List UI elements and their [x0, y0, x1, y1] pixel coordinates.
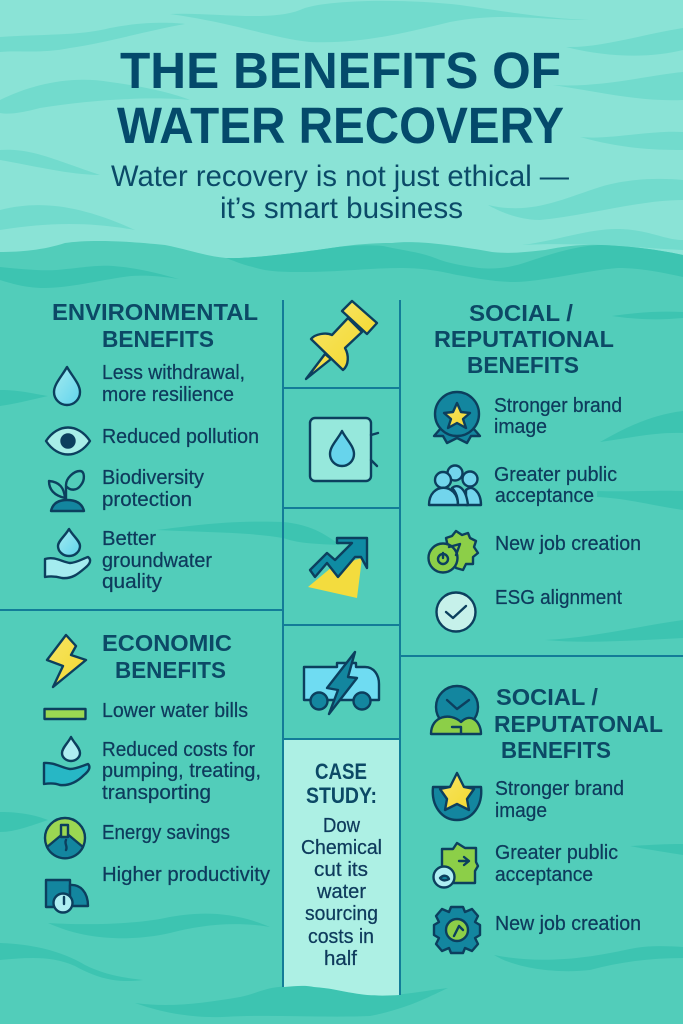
heading: economic benefits: ECONOMIC [102, 630, 232, 656]
heading: social reputational benefits: SOCIAL / [469, 300, 573, 326]
heading: case study: CASE [315, 759, 367, 784]
heading: case study: STUDY: [306, 783, 377, 808]
heading: social reputatonal benefits: REPUTATONAL [494, 711, 663, 737]
text: case study body: sourcing [305, 903, 378, 925]
background: lower teal water [0, 241, 683, 1024]
icon: check head with hills [431, 686, 481, 734]
icon: eye [46, 428, 90, 454]
text: reduced costs: pumping, treating, [102, 760, 261, 782]
text: stronger brand image: image [494, 416, 547, 438]
icon: energy circle [45, 818, 85, 858]
text: greater public acceptance: acceptance [495, 864, 593, 886]
text: greater public acceptance: acceptance [495, 485, 594, 507]
text: lower water bills: Lower water bills [102, 700, 248, 722]
heading: economic benefits: BENEFITS [115, 657, 226, 683]
background: upper light water [0, 0, 683, 300]
text: better groundwater quality: groundwater [102, 550, 212, 572]
text: greater public acceptance [495, 842, 618, 886]
text: case study body: half [324, 948, 357, 970]
text: energy savings: Energy savings [102, 822, 230, 844]
text: case study body: Chemical [301, 837, 382, 859]
text: less withdrawal: more resilience [102, 384, 234, 406]
icon: growth chart arrow [308, 538, 367, 598]
panel: economic benefits [44, 630, 270, 912]
icon: push pin [306, 301, 377, 379]
panel: social reputational benefits (upper) [428, 300, 641, 632]
text: better groundwater quality: quality [102, 571, 162, 593]
heading: environmental benefits: ENVIRONMENTAL [52, 299, 258, 325]
subtitle: Water recovery is not just ethical — [111, 160, 569, 193]
text: new job creation: New job creation [495, 533, 641, 555]
background: upper wave strokes [0, 1, 683, 250]
icon: document with badge [434, 843, 478, 888]
icon: water drop [54, 367, 80, 405]
icon: truck with lightning [304, 652, 379, 714]
text: case study body [301, 815, 382, 970]
icon: people group [429, 466, 481, 505]
heading: economic benefits [102, 630, 232, 683]
icon: lightning bolt [47, 635, 86, 687]
heading: environmental benefits: BENEFITS [102, 326, 214, 352]
icon: hand with drop [45, 529, 90, 578]
heading: social reputational benefits: REPUTATIONAL [434, 326, 614, 352]
text: stronger brand image: image [495, 800, 547, 822]
subtitle: it’s smart business [220, 192, 463, 225]
icon: meter device [46, 880, 88, 912]
text: greater public acceptance [494, 464, 617, 507]
text: higher productivity: Higher productivity [102, 864, 270, 886]
text: case study body: cut its [314, 859, 368, 881]
text: reduced pollution: Reduced pollution [102, 426, 259, 448]
icon: green gear [428, 531, 478, 572]
text: stronger brand image: Stronger brand [495, 778, 624, 800]
text: better groundwater quality: Better [102, 528, 156, 550]
icon: bill bar [44, 709, 86, 719]
text: biodiversity protection: protection [102, 489, 192, 511]
icon: water drop in box [310, 418, 378, 481]
subtitle [111, 160, 569, 225]
text: reduced costs [102, 739, 261, 804]
icon: gear [434, 907, 480, 953]
text: reduced costs: transporting [102, 782, 211, 804]
panel: center icon column [304, 301, 379, 714]
panel: environmental benefits [45, 299, 259, 593]
text: stronger brand image [494, 395, 622, 438]
text: biodiversity protection [102, 467, 204, 511]
heading: social reputational benefits: BENEFITS [467, 352, 579, 378]
grid lines [0, 300, 683, 995]
text: better groundwater quality [102, 528, 212, 593]
icon: star in bowl [433, 773, 481, 820]
heading: social reputatonal benefits [494, 684, 663, 763]
text: less withdrawal: Less withdrawal, [102, 362, 245, 384]
icon: hand with small drop [44, 737, 89, 785]
heading: case study [306, 759, 377, 808]
case study panel background [284, 740, 399, 996]
title: THE BENEFITS OF [120, 42, 561, 99]
heading: social reputatonal benefits: BENEFITS [501, 737, 611, 763]
text: less withdrawal [102, 362, 245, 406]
text: case study body: costs in [308, 926, 374, 948]
icon: plant [49, 471, 84, 511]
heading: social reputational benefits [434, 300, 614, 378]
text: reduced costs: Reduced costs for [102, 739, 255, 761]
text: biodiversity protection: Biodiversity [102, 467, 204, 489]
text: stronger brand image [495, 778, 624, 822]
icon: award badge [434, 392, 480, 443]
title: WATER RECOVERY [117, 97, 564, 154]
text: greater public acceptance: Greater public [494, 464, 617, 486]
text: case study body: Dow [323, 815, 361, 837]
background: lower wave strokes [0, 245, 683, 1017]
text: stronger brand image: Stronger brand [494, 395, 622, 417]
text: new job creation: New job creation [495, 913, 641, 935]
panel: case study [301, 759, 382, 970]
text: greater public acceptance: Greater public [495, 842, 618, 864]
text: esg alignment: ESG alignment [495, 587, 622, 609]
title [117, 42, 564, 154]
icon: check circle [436, 592, 476, 632]
panel: social reputational benefits (lower) [431, 684, 663, 953]
text: case study body: water [316, 881, 366, 903]
heading: social reputatonal benefits: SOCIAL / [496, 684, 598, 710]
heading: environmental benefits [52, 299, 258, 352]
